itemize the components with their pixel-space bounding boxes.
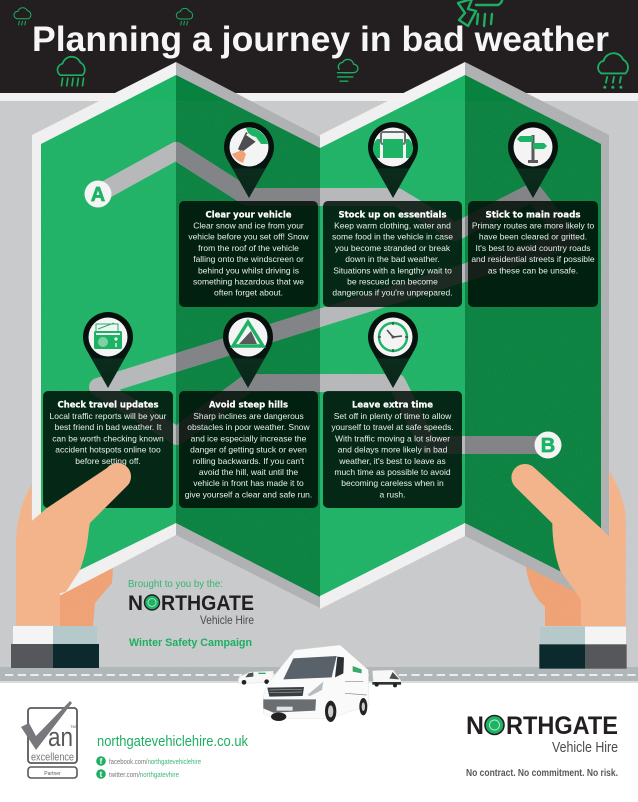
card: clear your vehicle: behind you whilst driving is — [198, 265, 299, 275]
icon: radio — [94, 323, 122, 349]
icon: clock — [378, 322, 408, 352]
map panel 1 — [41, 75, 176, 589]
left hand — [11, 463, 131, 668]
header white strip — [0, 93, 638, 101]
icon: wind cloud — [338, 59, 358, 81]
map panel 1 border — [32, 62, 176, 610]
card: stock up on essentials: some food in the vehicle in case — [332, 232, 453, 242]
marker B: B — [541, 435, 555, 457]
card: check travel updates: Local traffic reports will be your — [49, 411, 167, 421]
twitter link: t — [100, 770, 103, 779]
northgate logo small: N — [128, 592, 143, 615]
card: stock up on essentials: dangerous if you're unprepared. — [332, 288, 453, 298]
card: check travel updates — [43, 391, 173, 508]
card: check travel updates: accident hotspots online too — [55, 445, 161, 455]
card: stock up on essentials: Stock up on essentials — [338, 210, 446, 220]
pin: stick to main roads — [508, 122, 558, 198]
left palm and finger — [16, 463, 131, 626]
card: stick to main roads: and residential streets if possible — [471, 254, 595, 264]
card: leave extra time: much time as possible to avoid — [334, 467, 451, 477]
icon: hail cloud — [598, 53, 628, 89]
northgate logo large — [466, 712, 618, 756]
van excellence badge: an — [48, 722, 73, 752]
paper grain — [0, 101, 638, 667]
map panel 2 border — [176, 62, 320, 608]
card: stick to main roads: as these can be unsafe. — [488, 265, 578, 275]
map panel 4 border — [465, 62, 609, 609]
website and social links — [96, 733, 248, 779]
card: stock up on essentials: Keep warm clothing, water and — [334, 220, 451, 230]
card: avoid steep hills: avoid the hill, wait until the — [199, 467, 298, 477]
facebook link — [96, 756, 201, 766]
marker A — [84, 180, 112, 208]
map panel 3 — [320, 75, 465, 596]
road strip — [0, 667, 638, 683]
card: leave extra time: and delays more likely in bad — [338, 445, 448, 455]
right palm and finger — [511, 464, 626, 626]
van excellence badge: Partner — [44, 771, 61, 777]
marker A: A — [91, 184, 105, 206]
card: leave extra time: Set off in plenty of time to allow — [334, 411, 452, 421]
marker B — [534, 432, 562, 458]
right cuff — [539, 627, 627, 669]
card: avoid steep hills — [179, 391, 318, 508]
title: Planning a journey in bad weather — [32, 20, 609, 59]
winter safety campaign: Winter Safety Campaign — [129, 637, 252, 649]
icon: signpost — [517, 135, 547, 163]
card: clear your vehicle: Clear snow and ice from your — [193, 220, 304, 230]
left thumb behind map — [60, 568, 113, 626]
card: clear your vehicle: Clear your vehicle — [206, 210, 292, 220]
facebook link: f — [100, 757, 103, 766]
grey table surface — [0, 101, 638, 667]
brought to you by: Brought to you by the: — [128, 578, 223, 590]
pin: check travel updates — [83, 312, 133, 388]
northgate logo small: RTHGATE — [161, 592, 254, 615]
header band — [0, 0, 638, 93]
weather icons in header — [14, 0, 628, 89]
card: stick to main roads: have been cleared or gritted. — [479, 232, 587, 242]
van excellence badge: excellence — [31, 752, 74, 764]
card: leave extra time: With traffic moving a lot slower — [335, 433, 450, 443]
card: check travel updates: can be worth checking known — [52, 433, 164, 443]
card: avoid steep hills: danger of getting stuck or even — [190, 445, 307, 455]
card: stock up on essentials: Situations with a lengthy wait to — [333, 265, 452, 275]
map panel 3 border — [320, 62, 465, 609]
card: stock up on essentials — [323, 201, 462, 307]
card: stock up on essentials: be rescued can become — [347, 276, 438, 286]
card: stock up on essentials: you become stranded or break — [335, 243, 451, 253]
card: clear your vehicle — [179, 201, 318, 307]
map panel 4 — [465, 75, 601, 592]
card: stick to main roads: Stick to main roads — [486, 210, 580, 220]
twitter link — [96, 769, 179, 779]
card: avoid steep hills: and ice especially increase the — [191, 433, 307, 443]
card: stick to main roads — [468, 201, 598, 307]
card: leave extra time: weather, it's best to leave as — [338, 456, 446, 466]
left cuff — [11, 626, 99, 668]
icon: scraper in hand — [232, 128, 268, 163]
campaign logo block — [128, 578, 254, 649]
card: leave extra time — [323, 391, 462, 508]
card: leave extra time: becoming careless when in — [341, 478, 444, 488]
pin: avoid steep hills — [223, 312, 273, 388]
card: clear your vehicle: vehicle before you set off! Snow — [188, 232, 310, 242]
northgate logo large: N — [466, 712, 484, 740]
card: leave extra time: a rush. — [380, 489, 406, 499]
card: avoid steep hills: obstacles in poor weather. Snow — [187, 422, 311, 432]
northgate logo large: RTHGATE — [506, 712, 618, 740]
card: avoid steep hills: give yourself a clear and safe run. — [185, 489, 312, 499]
card: avoid steep hills: rolling backwards. If you can't — [193, 456, 305, 466]
twitter link: twitter.com/northgatevhire — [109, 772, 179, 779]
card: stock up on essentials: down in the bad weather. — [345, 254, 440, 264]
card: clear your vehicle: often forget about. — [214, 288, 283, 298]
card: avoid steep hills: Sharp inclines are dangerous — [193, 411, 304, 421]
van excellence badge — [21, 701, 77, 778]
card: check travel updates: best friend in bad weather. It — [55, 422, 162, 432]
right hand — [511, 464, 627, 669]
facebook link: facebook.com/northgatevehiclehire — [109, 759, 201, 766]
small van right — [372, 670, 401, 687]
card: leave extra time: yourself to travel at safe speeds. — [331, 422, 454, 432]
card: clear your vehicle: falling onto the windscreen or — [193, 254, 304, 264]
check mark — [21, 701, 72, 750]
icon: rain cloud 1 — [14, 8, 31, 25]
website: northgatevehiclehire.co.uk — [97, 733, 248, 750]
northgate logo small — [128, 592, 254, 627]
pin: clear your vehicle — [224, 122, 274, 198]
icon: rain cloud 2 — [176, 8, 193, 25]
card: stick to main roads: It's best to avoid country roads — [475, 243, 591, 253]
folded map — [32, 62, 609, 610]
pin: leave extra time — [368, 312, 418, 388]
northgate logo small: Vehicle Hire — [200, 613, 254, 627]
route on map — [98, 151, 570, 445]
card: leave extra time: Leave extra time — [352, 400, 433, 410]
card: check travel updates: before setting off. — [75, 456, 141, 466]
northgate logo large: Vehicle Hire — [552, 739, 618, 756]
van excellence badge: TM — [70, 724, 76, 729]
icon: lightning cloud — [458, 0, 503, 26]
icon: rain cloud 3 — [57, 57, 85, 86]
card: clear your vehicle: something hazardous that we — [193, 276, 304, 286]
icon: hill warning triangle — [233, 322, 263, 346]
main van — [263, 645, 369, 722]
right thumb behind map — [526, 567, 581, 626]
card: clear your vehicle: from the roof of the vehicle — [198, 243, 299, 253]
small van left — [238, 671, 273, 685]
icon: holdall bag — [373, 132, 413, 158]
vans — [238, 645, 401, 722]
card: avoid steep hills: Avoid steep hills — [209, 400, 288, 410]
card: check travel updates: Check travel updates — [58, 400, 158, 410]
map panel 2 — [176, 75, 320, 597]
card: stick to main roads: Primary routes are more likely to — [472, 220, 594, 230]
card: avoid steep hills: vehicle in front has made it to — [193, 478, 304, 488]
pin: stock up on essentials — [368, 122, 418, 198]
